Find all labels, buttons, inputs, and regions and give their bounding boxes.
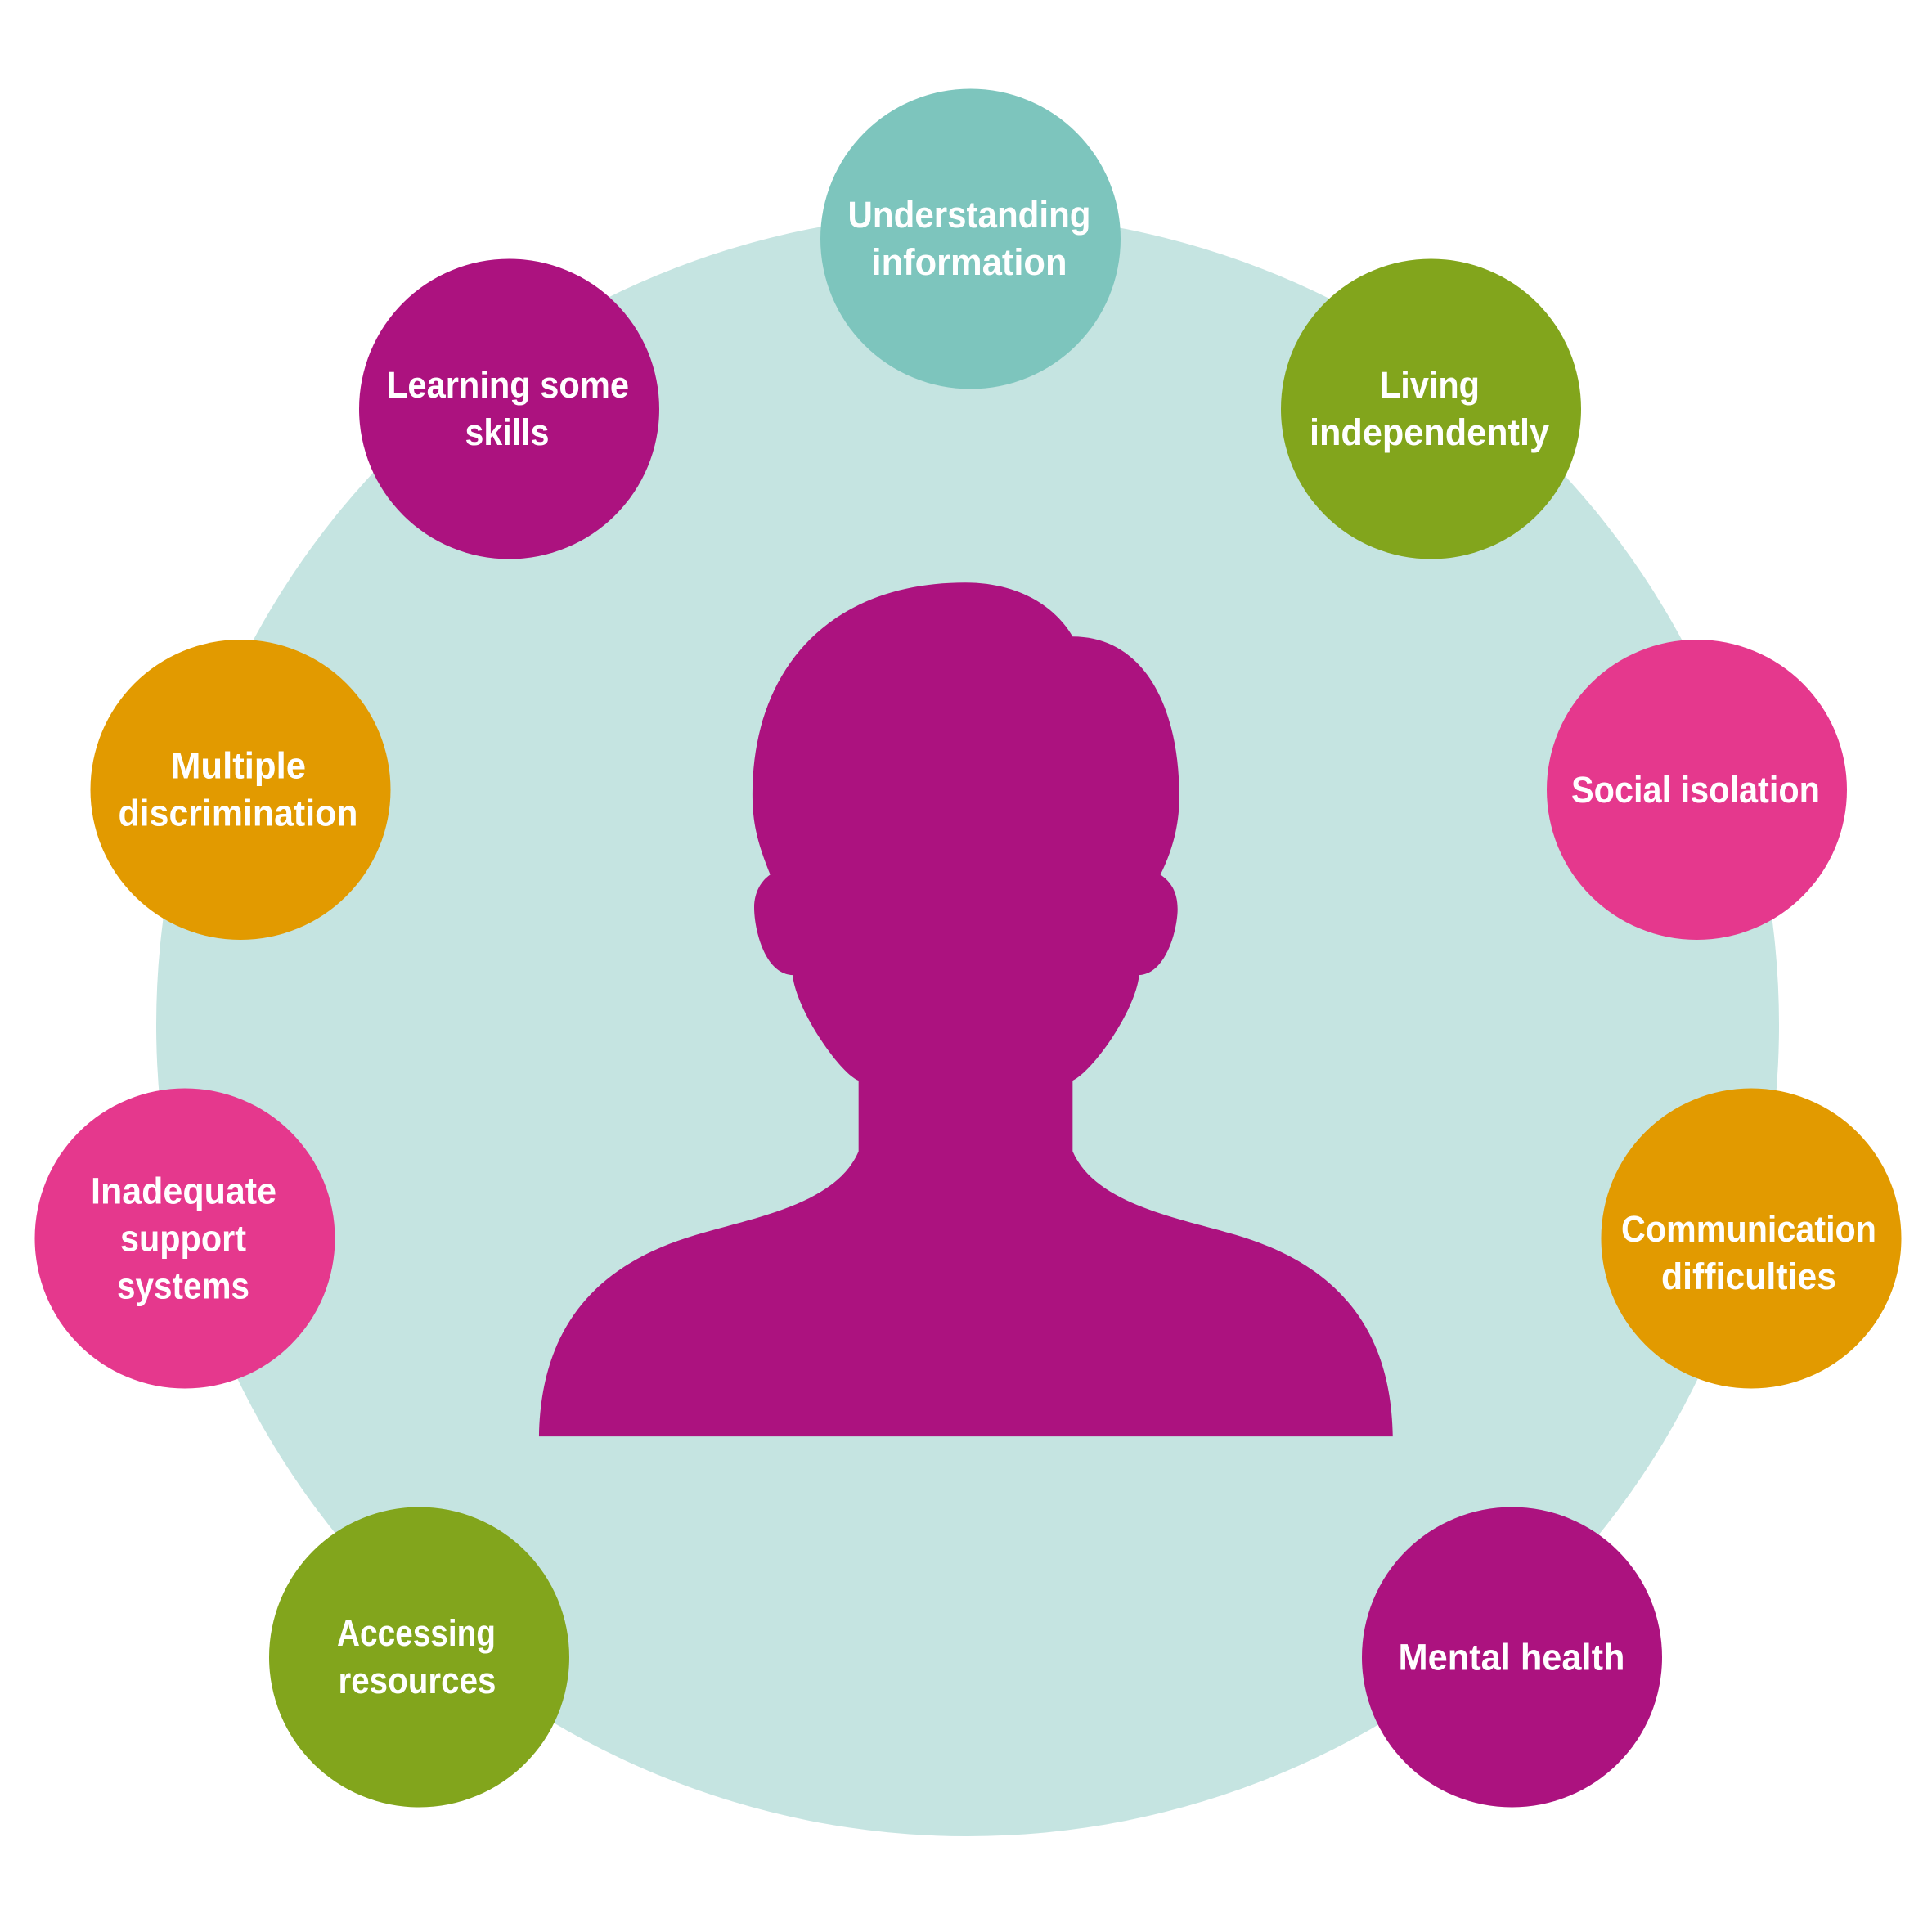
circle: Understanding information bbox=[820, 88, 1121, 389]
circle: Understanding information: Understanding bbox=[847, 194, 1091, 236]
circle: Accessing resources: Accessing bbox=[337, 1612, 496, 1654]
circle: Multiple discrimination bbox=[90, 640, 391, 940]
circle: Accessing resources bbox=[269, 1507, 569, 1808]
circle: Learning some skills: skills bbox=[465, 411, 550, 453]
circle: Living independently: Living bbox=[1380, 364, 1480, 406]
circle: Inadequate support systems: Inadequate bbox=[91, 1170, 276, 1212]
central person silhouette bbox=[539, 582, 1393, 1436]
circle: Multiple discrimination: discrimination bbox=[118, 792, 358, 834]
circle: Inadequate support systems: support bbox=[120, 1217, 246, 1260]
circle: Communication difficulties bbox=[1602, 1088, 1901, 1389]
circle: Learning some skills bbox=[359, 258, 659, 559]
large background circle bbox=[156, 213, 1779, 1836]
circle: Understanding information: information bbox=[872, 241, 1067, 283]
circle: Inadequate support systems: systems bbox=[117, 1265, 249, 1307]
circle: Multiple discrimination: Multiple bbox=[171, 744, 306, 787]
circle: Communication difficulties: difficulties bbox=[1661, 1256, 1836, 1297]
circle: Accessing resources: resources bbox=[339, 1660, 496, 1701]
circle: Learning some skills: Learning some bbox=[387, 364, 629, 406]
circle: Living independently bbox=[1281, 258, 1581, 559]
circle: Mental health: Mental health bbox=[1399, 1636, 1624, 1678]
circle: Social isolation: Social isolation bbox=[1571, 769, 1820, 811]
circle: Living independently: independently bbox=[1310, 411, 1549, 453]
circle: Mental health bbox=[1362, 1507, 1662, 1808]
circle: Inadequate support systems bbox=[34, 1088, 335, 1389]
circle: Communication difficulties: Communication bbox=[1621, 1208, 1876, 1250]
circle: Social isolation bbox=[1547, 640, 1847, 940]
